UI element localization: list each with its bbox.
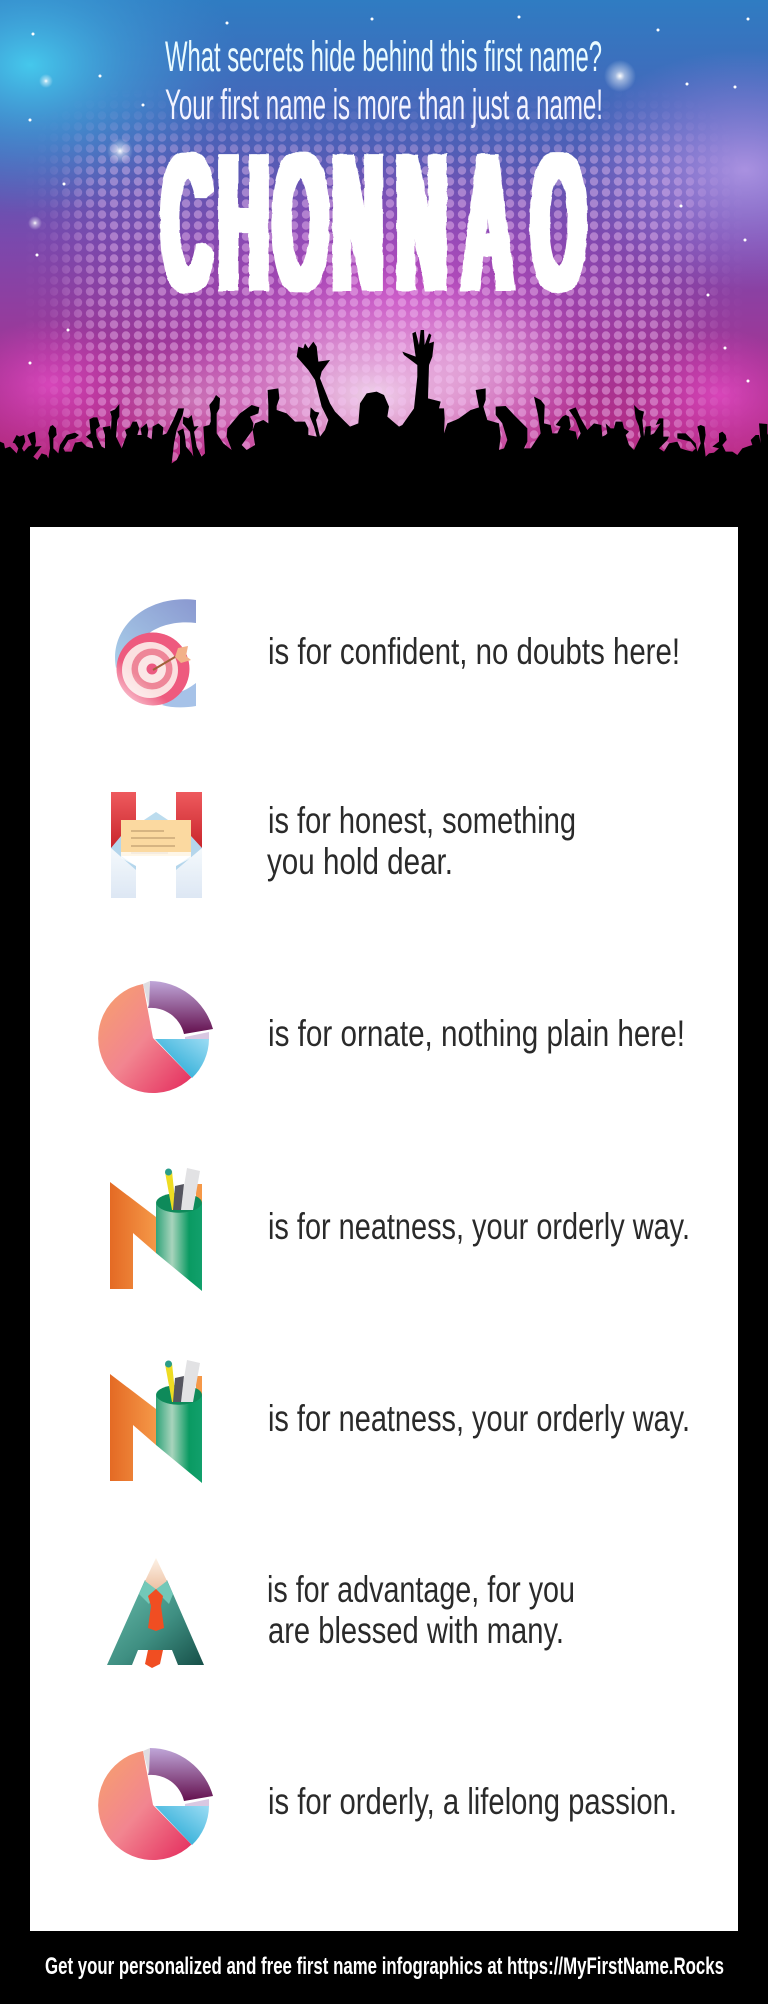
icon: letter N with pen cup (110, 1168, 202, 1291)
stage light glows (0, 0, 768, 460)
text: advantage line 2: are blessed with many. (268, 1610, 564, 1651)
crowd silhouette (0, 330, 768, 538)
icon: letter H with envelope (111, 792, 202, 898)
icon: letter C with target (115, 599, 196, 707)
icon: second letter O pie chart (98, 1748, 213, 1860)
row: A is for advantage (107, 1558, 575, 1668)
name title: CHONNAO (162, 114, 585, 333)
row: C is for confident (115, 599, 680, 707)
row: N is for neatness (110, 1168, 690, 1291)
central white glow (100, 270, 600, 520)
row: H is for honest (111, 792, 576, 898)
icon: second letter N with pen cup (110, 1360, 202, 1483)
white content panel (30, 527, 738, 1931)
icon: letter A with suit and tie (107, 1558, 204, 1668)
dot matrix screen (45, 107, 722, 461)
text: honest line 2: you hold dear. (267, 841, 453, 882)
row: second N is for neatness (110, 1360, 690, 1483)
text: honest line 1: is for honest, something (268, 800, 576, 841)
row: O is for ornate (98, 981, 685, 1093)
sparkles (28, 16, 750, 382)
stage background gradient (0, 0, 768, 480)
text: advantage line 1: is for advantage, for you (267, 1569, 575, 1610)
row: O is for orderly (98, 1748, 677, 1860)
header banner (0, 0, 768, 464)
icon: letter O pie chart (98, 981, 213, 1093)
